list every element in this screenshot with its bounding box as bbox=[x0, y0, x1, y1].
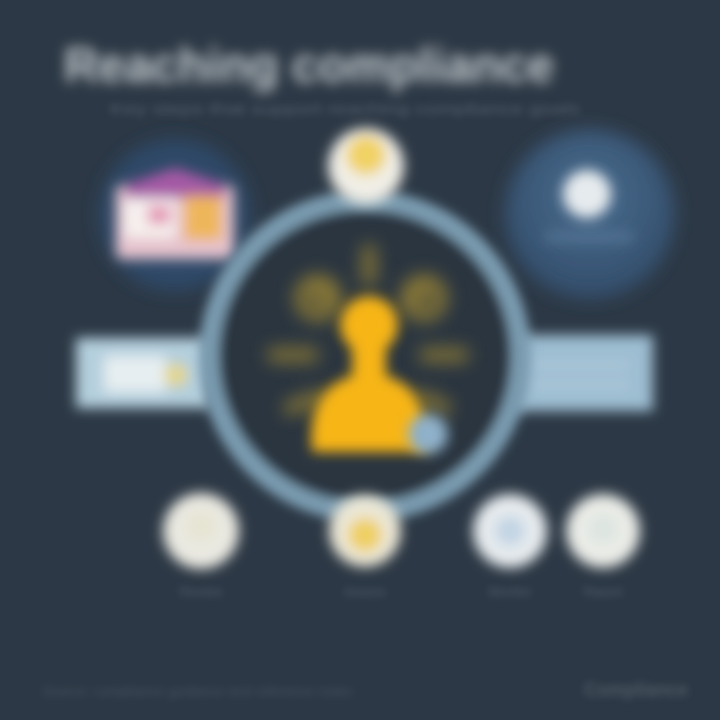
icon: top circle bbox=[328, 128, 404, 204]
left circular backdrop bbox=[99, 139, 251, 291]
bottom labels: Monitor bbox=[488, 584, 532, 599]
icon: bottom right circle one bbox=[473, 494, 547, 568]
icon: envelope card bbox=[116, 168, 234, 259]
central ring bbox=[209, 200, 521, 512]
icon: white badge in blue disc bbox=[545, 170, 633, 242]
icon: bottom left circle bbox=[163, 493, 239, 569]
bottom labels: Report bbox=[583, 584, 623, 599]
icon: central person bbox=[311, 296, 426, 452]
blue disc panel bbox=[505, 129, 675, 299]
bottom labels bbox=[180, 584, 623, 599]
central radiating lines bbox=[268, 245, 468, 410]
footer note: Source: compliance guidance and reference notes bbox=[42, 683, 352, 699]
left label box bbox=[76, 338, 211, 408]
icon: bottom centre circle bbox=[329, 495, 401, 567]
subtitle: Key steps that support reaching compliance goals bbox=[110, 101, 580, 118]
icon: small badge bbox=[408, 414, 448, 454]
bottom labels: Assess bbox=[344, 584, 386, 599]
icon: bottom right circle two bbox=[566, 494, 640, 568]
right label box bbox=[510, 335, 653, 411]
footer logo: Compliance bbox=[584, 680, 688, 701]
bottom labels: Review bbox=[180, 584, 223, 599]
title: Reaching compliance bbox=[64, 39, 554, 93]
